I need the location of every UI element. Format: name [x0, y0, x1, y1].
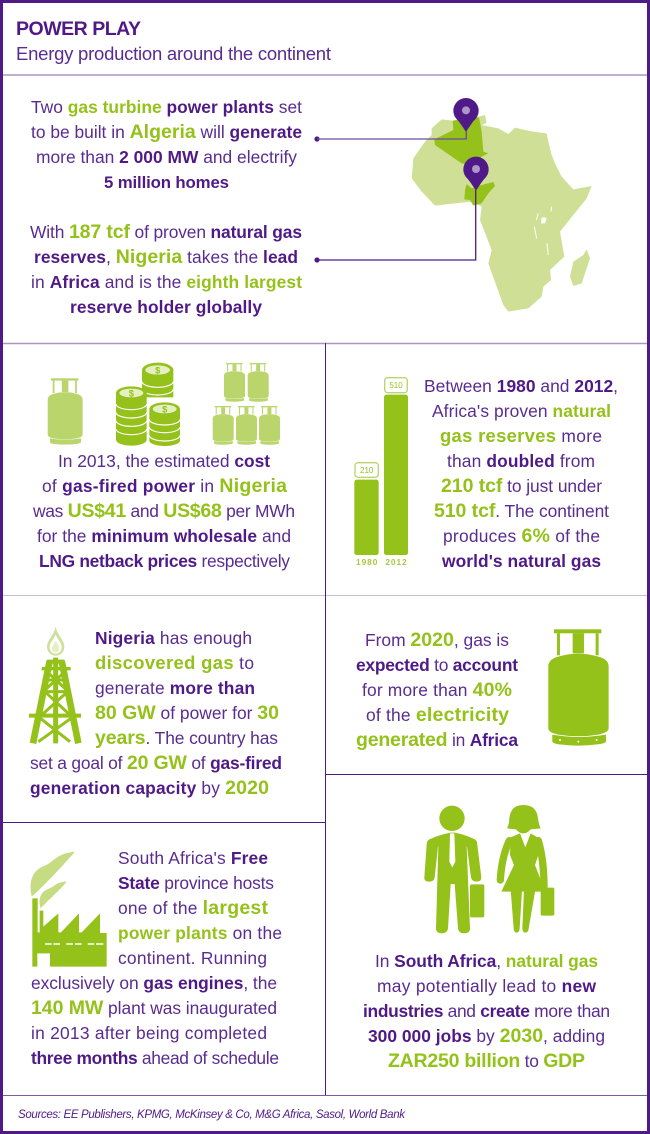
icon: coin stacks: $ — [129, 388, 135, 398]
text block: 2020 electricity share: for more than 40% — [362, 679, 512, 701]
bar: 1980: 210 — [360, 466, 374, 475]
text block: South Africa jobs: 300 000 jobs by 2030, adding — [368, 1025, 605, 1047]
text block: Algeria gas turbine plants: Two gas turbine power plants set — [31, 97, 302, 117]
text block: Free State power plant: State province hosts — [118, 873, 274, 893]
text block: Free State power plant: power plants on the — [118, 923, 282, 943]
text block: South Africa jobs: may potentially lead to new — [377, 976, 596, 996]
icon: business man and woman — [424, 805, 554, 933]
text block: cost of gas-fired power: was US$41 and US$68 per MWh — [32, 500, 295, 522]
text block: Free State power plant: continent. Running — [118, 948, 267, 968]
map of Africa with pins — [412, 98, 592, 312]
text block: 2020 electricity share: expected to account — [356, 655, 518, 675]
text block: South Africa jobs: ZAR250 billion to GDP — [388, 1050, 585, 1072]
subtitle: Energy production around the continent — [16, 43, 331, 64]
bar: 1980 — [354, 463, 379, 567]
map: Algeria highlighted — [434, 117, 488, 165]
text block: Nigeria gas reserves: With 187 tcf of proven natural gas — [30, 221, 302, 243]
text block: reserves doubled: produces 6% of the — [443, 525, 600, 547]
icon: single gas cylinder — [48, 378, 83, 445]
text block: reserves doubled: Between 1980 and 2012, — [424, 376, 618, 396]
text block: Nigeria discovered gas — [30, 628, 282, 799]
bar: 1980: 1980 — [356, 557, 378, 567]
text block: reserves doubled: 210 tcf to just under — [441, 475, 602, 497]
text block: cost of gas-fired power: of gas-fired power in Nigeria — [42, 475, 287, 497]
title: Power Play: POWER PLAY — [16, 18, 141, 40]
text block: Free State power plant: three months ahead of schedule — [31, 1048, 279, 1068]
connector: Nigeria — [314, 190, 476, 263]
icon: large gas cylinder — [548, 629, 609, 746]
text block: Nigeria gas reserves: reserves, Nigeria takes the lead — [34, 246, 298, 268]
text block: Free State power plant: 140 MW plant was inaugurated — [31, 997, 277, 1019]
text block: Free State power plant: South Africa's Free — [118, 848, 268, 868]
bar chart: proven reserves — [354, 378, 408, 567]
text block: Free State power plant: one of the largest — [118, 897, 268, 919]
text block: reserves doubled: world's natural gas — [441, 551, 601, 571]
text block: Nigeria discovered gas: generate more than — [95, 678, 255, 698]
text block: Nigeria gas reserves — [30, 221, 302, 317]
pin: Nigeria — [463, 157, 489, 191]
text block: Algeria gas turbine plants: more than 2 000 MW and electrify — [36, 147, 297, 167]
text block: cost of gas-fired power: In 2013, the estimated cost — [58, 451, 270, 471]
text block: South Africa jobs — [363, 951, 610, 1072]
text block: 2020 electricity share: of the electricity — [366, 704, 509, 726]
text block: Nigeria discovered gas: years. The country has — [95, 727, 278, 749]
text block: Nigeria discovered gas: 80 GW of power for 30 — [95, 702, 279, 724]
text block: 2020 electricity share: From 2020, gas is — [365, 629, 509, 651]
text block: Nigeria discovered gas: set a goal of 20 GW of gas-fired — [30, 752, 282, 774]
icon: factory with smoke — [31, 852, 107, 967]
text block: South Africa jobs: industries and create more than — [363, 1001, 610, 1021]
text block: reserves doubled: gas reserves more — [440, 425, 602, 446]
text block: Nigeria gas reserves: in Africa and is the eighth largest — [31, 272, 302, 292]
text block: Nigeria discovered gas: generation capacity by 2020 — [30, 777, 269, 799]
title: Power Play — [16, 18, 331, 64]
text block: Nigeria discovered gas: Nigeria has enough — [95, 628, 252, 648]
bar: 2012 — [384, 378, 408, 567]
text block: 2020 electricity share — [356, 629, 518, 751]
text block: Algeria gas turbine plants: 5 million homes — [104, 173, 229, 192]
bar: 2012: 510 — [389, 381, 403, 390]
connector: Algeria — [314, 131, 466, 142]
text block: cost of gas-fired power: for the minimum wholesale and — [37, 526, 291, 546]
text block: Free State power plant — [31, 848, 282, 1068]
icon: coin stacks: $ — [155, 365, 161, 375]
text block: Algeria gas turbine plants — [31, 97, 302, 192]
pin: Algeria — [453, 98, 479, 132]
icon: man — [424, 806, 484, 933]
text block: South Africa jobs: In South Africa, natural gas — [375, 951, 598, 971]
text block: Nigeria discovered gas: discovered gas to — [95, 652, 254, 673]
bar: 2012: 2012 — [385, 557, 407, 567]
text block: cost of gas-fired power — [32, 451, 295, 571]
text block: reserves doubled: 510 tcf. The continent — [434, 500, 609, 522]
text block: Nigeria gas reserves: reserve holder globally — [70, 297, 262, 317]
text block: 2020 electricity share: generated in Africa — [356, 729, 518, 751]
icon: woman — [500, 805, 554, 933]
text block: reserves doubled: than doubled from — [447, 451, 595, 471]
sources: Sources: EE Publishers, KPMG, McKinsey & Co, M&G Africa, Sasol, World Bank — [18, 1109, 406, 1121]
map: Nigeria highlighted — [464, 182, 495, 206]
icon: coin stacks: $ — [162, 404, 168, 414]
map: Africa continent — [412, 115, 592, 312]
text block: reserves doubled — [424, 376, 618, 571]
icon: coin stacks — [116, 363, 180, 446]
text block: cost of gas-fired power: LNG netback prices respectively — [39, 551, 290, 571]
text block: Algeria gas turbine plants: to be built in Algeria will generate — [31, 121, 302, 143]
text block: Free State power plant: in 2013 after being completed — [31, 1023, 267, 1043]
icon: gas derrick with flame — [29, 627, 81, 743]
text block: reserves doubled: Africa's proven natural — [432, 401, 611, 421]
text block: Free State power plant: exclusively on gas engines, the — [31, 973, 277, 993]
icon: group of gas cylinders — [213, 363, 280, 445]
